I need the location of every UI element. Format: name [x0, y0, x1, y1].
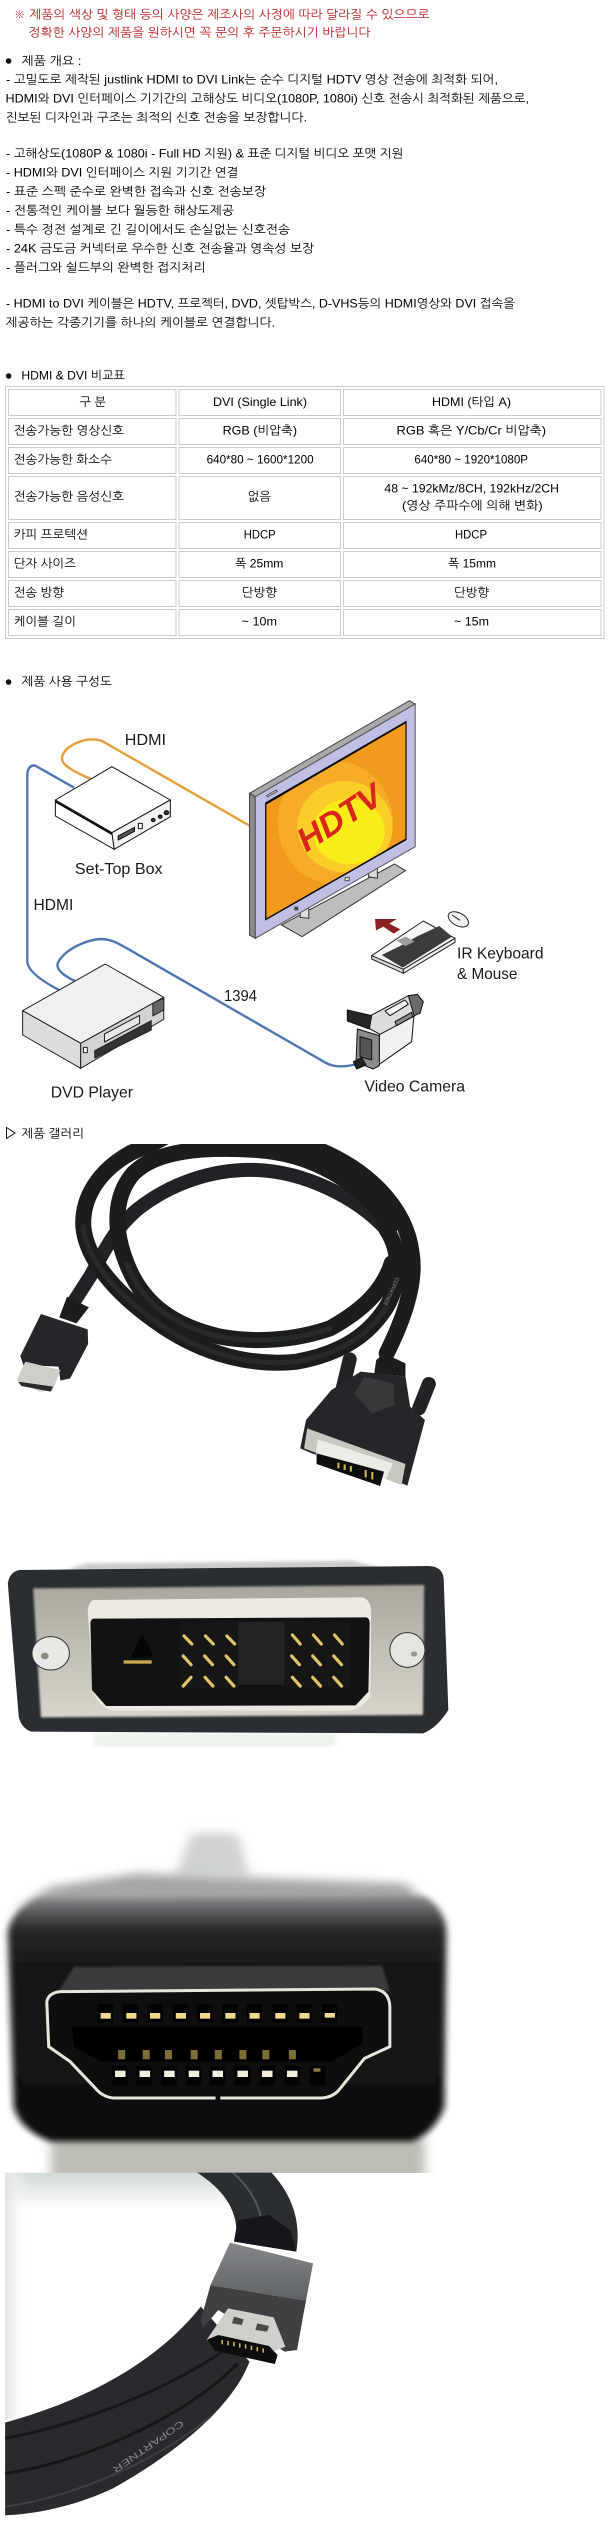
bottom row pins: [112, 2066, 326, 2085]
heading: product gallery: 제품 갤러리: [21, 1126, 84, 1140]
table row: video signal: [8, 418, 601, 444]
connector cavity: [90, 1617, 370, 1706]
DVI thumbscrews: [341, 1359, 350, 1395]
DVI metal plate: [304, 1428, 405, 1485]
cable lettering: COPARTNER: [382, 1276, 400, 1306]
coil behind plug: [193, 2170, 298, 2252]
text block: feature list: [6, 146, 404, 274]
table row: pixels: 전송가능한 화소수: [14, 452, 112, 466]
notice: red warning text: ※ 제품의 색상 및 형태 등의 사양은 제조사의 사정에 따라 달라질 수 있으므로: [14, 8, 430, 22]
icon: set-top box: [55, 767, 170, 849]
metal shell: [47, 1989, 390, 2098]
bottom fade: [44, 2135, 432, 2173]
diagram labels: HDMI: [125, 732, 166, 749]
keyboard, mouse, arrow and camera artwork: [347, 909, 471, 1069]
table row: video signal: RGB (비압축): [223, 424, 297, 438]
diagram labels: IR Keyboard: [457, 946, 544, 962]
diagram labels: & Mouse: [457, 966, 517, 983]
icon: keyboard: [372, 921, 455, 973]
monitor bezel: [255, 704, 415, 938]
diagram labels: Video Camera: [364, 1078, 465, 1096]
table row: pixels: [8, 448, 601, 474]
text block: feature list: - 특수 정전 설계로 긴 길이에서도 손실없는 신호전송: [6, 222, 290, 236]
HDMI plug body: [20, 1314, 88, 1381]
thumbscrews: [32, 1633, 425, 1670]
text block: feature list: - 고해상도(1080P & 1080i - Full HD 지원) & 표준 디지털 비디오 포맷 지원: [6, 146, 404, 160]
monitor screen image: [265, 720, 407, 923]
photo: DVI connector close-up: [8, 1561, 448, 1747]
connection diagram: [23, 701, 544, 1102]
slot gold contacts: [118, 2050, 296, 2059]
heading: usage diagram: 제품 사용 구성도: [21, 674, 112, 688]
plug body upper: [211, 2243, 313, 2301]
coil in front: [5, 2307, 250, 2515]
diagram labels: DVD Player: [51, 1084, 134, 1102]
icon: mouse: [446, 909, 471, 930]
table row: direction: 단방향: [242, 586, 278, 600]
table row: length: 케이블 길이: [14, 614, 76, 628]
table row: direction: 단방향: [454, 586, 490, 600]
connector shell: [8, 1566, 448, 1733]
diagram labels: Set-Top Box: [75, 861, 163, 878]
text block: feature list: - 표준 스펙 준수로 완벽한 접속과 신호 전송보장: [6, 184, 266, 198]
text block: feature list: - 전통적인 케이블 보다 월등한 해상도제공: [6, 204, 234, 218]
text block: compatibility: - HDMI to DVI 케이블은 HDTV, 프로젝터, DVD, 셋탑박스, D-VHS등의 HDMI영상와 DVI 접속을: [6, 296, 515, 310]
notice: red warning text: [14, 8, 430, 40]
soft shadow below: [94, 1733, 335, 1747]
diagram labels: HDMI: [34, 897, 73, 914]
table row: video signal: 전송가능한 영상신호: [14, 424, 124, 438]
icon: HDTV monitor: [250, 701, 415, 938]
monitor stand: [281, 864, 405, 937]
text block: product overview: [6, 72, 529, 124]
photo background haze: [5, 2172, 228, 2202]
blurred top edge: [58, 1561, 390, 1573]
table row: pixels: 640*80 ~ 1920*1080P: [414, 452, 528, 466]
cable coils: [75, 1133, 413, 1363]
HDMI plug boot: [59, 1297, 89, 1323]
diagram labels: 1394: [224, 988, 257, 1005]
cable: orange HDMI from set-top box to TV: [62, 739, 250, 826]
raised lip: [58, 1966, 390, 1992]
table row: audio signal: 48 ~ 192kMz/8CH, 192kHz/2CH: [384, 482, 559, 496]
table row: copy protection: HDCP: [244, 528, 276, 542]
metal plate: [33, 1585, 424, 1717]
text block: product overview: 진보된 디자인과 구조는 최적의 신호 전송을 보장합니다.: [6, 110, 307, 124]
table row: length: [8, 610, 601, 636]
table row: audio signal: 전송가능한 음성신호: [14, 490, 124, 504]
cable neck blurred: [175, 1833, 250, 1877]
connector key block: [238, 1622, 285, 1685]
plug body: [8, 1897, 446, 2142]
table row: header: 구 분: [80, 395, 106, 409]
table row: direction: [8, 580, 601, 606]
DVI contacts: [317, 1453, 384, 1486]
table row: length: ~ 10m: [242, 614, 277, 628]
cable: blue HDMI from set-top box to DVD player: [27, 766, 74, 991]
text block: feature list: - HDMI와 DVI 인터페이스 지원 기기간 연결: [6, 166, 238, 180]
table row: pixels: 640*80 ~ 1600*1200: [207, 452, 314, 466]
monitor screen frame: [265, 721, 407, 921]
cable: blue 1394 from DVD player to camera: [57, 939, 357, 1066]
connector hood: [88, 1597, 371, 1711]
table row: audio signal: (영상 주파수에 의해 변화): [402, 498, 543, 512]
heading: product overview: 제품 개요 :: [21, 54, 81, 68]
diagram labels: [34, 732, 544, 1102]
cable lettering: COPARTNER: [110, 2418, 186, 2475]
contact slot: [71, 2027, 363, 2062]
HDMI plug metal shell: [17, 1362, 60, 1392]
table row: copy protection: 카피 프로텍션: [14, 528, 88, 542]
monitor side faces: [250, 793, 255, 938]
text block: product overview: - 고밀도로 제작된 justlink HDMI to DVI Link는 순수 디지털 HDTV 영상 전송에 최적화 되어,: [6, 72, 498, 86]
icon: DVD player: [23, 964, 164, 1068]
notice: red warning text: 정확한 사양의 제품을 원하시면 꼭 문의 후 주문하시기 바랍니다: [28, 26, 370, 40]
label: HDTV on screen: HDTV: [290, 775, 391, 859]
table row: direction: 전송 방향: [14, 586, 65, 600]
blade contact: [124, 1633, 154, 1664]
plug metal shell: [207, 2308, 285, 2353]
icon: video camera: [347, 994, 423, 1069]
table row: audio signal: 없음: [248, 490, 271, 504]
shell notch: [216, 2096, 220, 2100]
photo: full HDMI to DVI cable: [17, 1133, 429, 1486]
photo: HDMI connector close-up: [8, 1833, 446, 2193]
diagram artwork in scaled coordinates: [23, 701, 415, 1068]
table row: video signal: RGB 혹은 Y/Cb/Cr 비압축): [396, 424, 546, 438]
text block: feature list: - 24K 금도금 커넥터로 우수한 신호 전송율과 영속성 보장: [6, 242, 314, 256]
text block: compatibility: 제공하는 각종기기를 하나의 케이블로 연결합니다.: [6, 316, 275, 330]
table row: connector size: 폭 15mm: [448, 556, 496, 570]
plug mouth: [207, 2335, 278, 2364]
photo: HDMI plug and coiled cable: [5, 2170, 313, 2515]
table row: copy protection: [8, 522, 601, 548]
table row: length: ~ 15m: [454, 614, 489, 628]
heading: HDMI and DVI comparison: HDMI & DVI 비교표: [21, 368, 125, 382]
DVI plug body: [300, 1372, 425, 1486]
table row: header: DVI (Single Link): [213, 395, 307, 409]
table row: connector size: 단자 사이즈: [14, 556, 76, 570]
gold pins: [183, 1635, 342, 1686]
table row: copy protection: HDCP: [455, 528, 487, 542]
table row: connector size: 폭 25mm: [235, 556, 283, 570]
arrow: remote signal: [375, 919, 400, 934]
DVI boot: [374, 1353, 405, 1377]
table row: header: HDMI (타입 A): [432, 395, 511, 409]
text block: compatibility: [6, 296, 515, 330]
table row: audio signal: [8, 476, 601, 520]
plug body lower: [201, 2285, 306, 2352]
table row: connector size: [8, 552, 601, 578]
connectors in scaled coordinates: [17, 1297, 429, 1486]
top row pins: [97, 2004, 337, 2023]
text block: product overview: HDMI와 DVI 인터페이스 기기간의 고해상도 비디오(1080P, 1080i) 신호 전송시 최적화된 제품으로,: [6, 92, 529, 106]
text block: feature list: - 플러그와 쉴드부의 완벽한 접지처리: [6, 260, 206, 274]
comparison table: [6, 386, 604, 638]
table row: header: [8, 390, 601, 416]
